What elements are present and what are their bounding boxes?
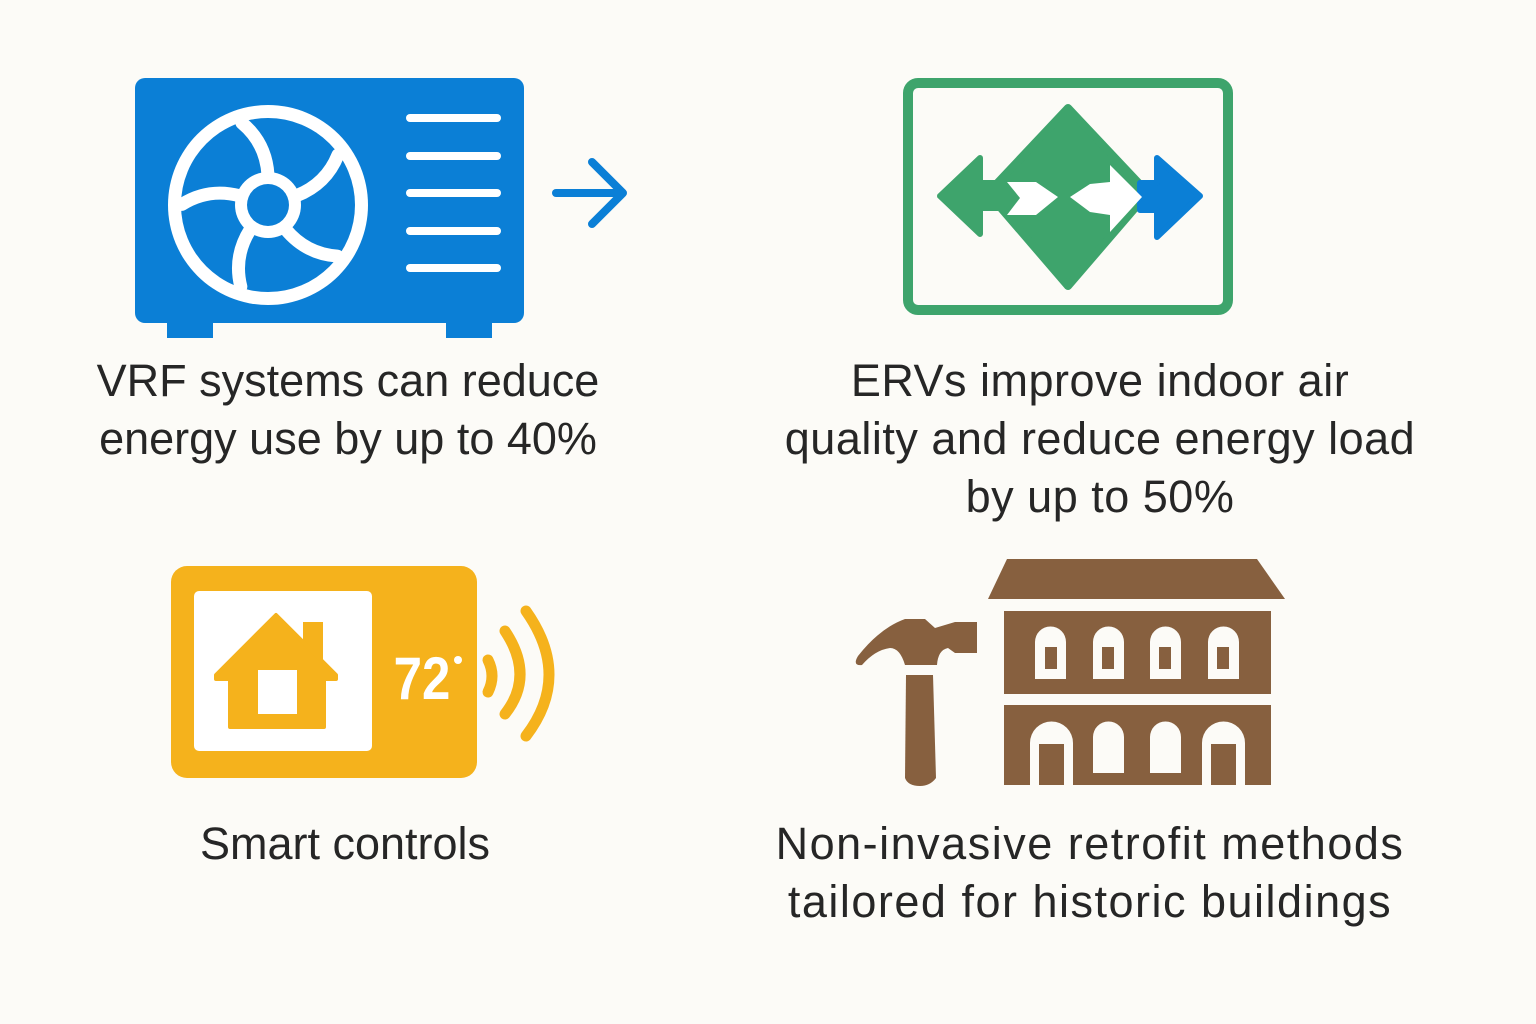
text: ERV: ERVs improve indoor air xyxy=(851,355,1349,406)
text: ERV xyxy=(785,355,1415,522)
text: VRF: VRF systems can reduce xyxy=(97,355,599,406)
icon: ERV xyxy=(908,83,1228,310)
text: VRF xyxy=(96,355,599,464)
icon: smart thermostat: 72 xyxy=(394,645,450,712)
text: VRF: energy use by up to 40% xyxy=(99,413,597,464)
text: ERV: by up to 50% xyxy=(966,471,1234,522)
text: smart controls: Smart controls xyxy=(200,818,490,869)
icon: VRF outdoor unit xyxy=(135,78,524,338)
icon: hammer and historic building xyxy=(856,559,1285,786)
text: retrofit: Non-invasive retrofit methods xyxy=(776,818,1404,869)
icon: smart thermostat xyxy=(171,566,549,778)
text: retrofit xyxy=(776,818,1404,927)
arrow: airflow xyxy=(556,162,623,224)
text: retrofit: tailored for historic buildings xyxy=(788,876,1392,927)
text: ERV: quality and reduce energy load xyxy=(785,413,1415,464)
